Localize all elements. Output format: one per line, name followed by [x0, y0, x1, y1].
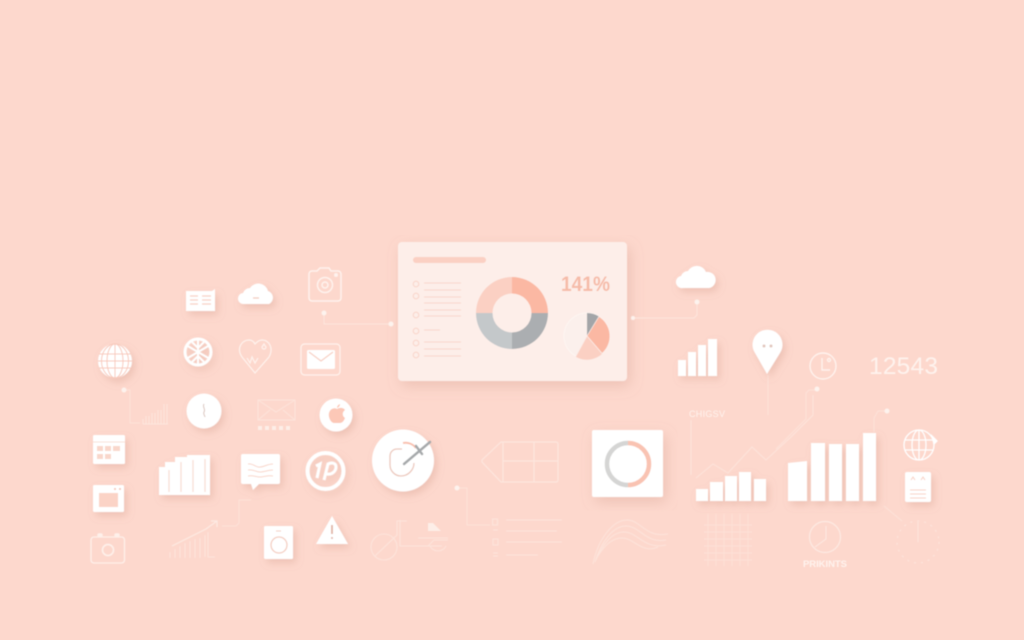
checklist [413, 281, 461, 358]
bar chart large [788, 433, 876, 501]
line chart with label [689, 395, 813, 478]
icon: snowflake wheel [185, 338, 211, 366]
connector: list [454, 486, 490, 525]
line chart with label: CHIGSV [689, 409, 725, 419]
icon: speech bubble [241, 454, 280, 490]
icon: calendar camera [91, 535, 124, 563]
icon: warning triangle [316, 516, 348, 544]
icon: browser window [93, 485, 124, 512]
icon: arrow tag grid [482, 442, 558, 482]
icon: calendar grid [93, 435, 125, 464]
icon: cloud left [238, 284, 273, 304]
icon: clock with label [803, 522, 847, 570]
icon: form document [905, 472, 931, 502]
icon: mini bars outline [143, 404, 168, 424]
connector: speech to arrow [222, 500, 251, 526]
icon: dotted clock [897, 521, 939, 563]
icon: washer tile [264, 526, 293, 559]
infographic content [91, 242, 939, 570]
card title bar [413, 257, 486, 263]
icon: bars top right [678, 339, 717, 376]
icon: camera outline [309, 268, 341, 301]
number label: 12543 [869, 353, 938, 380]
connector: card to cloud [631, 300, 700, 320]
icon: donut tile [592, 430, 663, 497]
icon: grid [704, 514, 752, 566]
panel: central dashboard card [398, 242, 627, 381]
connector: bars to dot [874, 408, 890, 432]
icon: envelope with dots [258, 400, 295, 430]
percentage label: 141% [561, 273, 610, 296]
connector: camera to card [322, 310, 394, 326]
icon: globe left [98, 344, 132, 378]
icon: p badge [308, 453, 344, 489]
icon: flowing waves [593, 520, 668, 564]
icon: mail framed [301, 344, 340, 375]
icon: clock with label: PRIKINTS [803, 559, 847, 570]
pie chart [564, 313, 610, 360]
connector: globe to mini chart [122, 388, 140, 423]
icon: heart outline [240, 340, 271, 373]
icon: globe right [904, 430, 937, 460]
icon: newspaper [186, 289, 215, 311]
bar chart small [696, 472, 766, 501]
icon: scooter [371, 520, 448, 560]
icon: map pin [753, 330, 783, 374]
icon: cloud right [676, 266, 716, 288]
connector: form to clock [884, 506, 902, 521]
icon: target dial [372, 430, 434, 492]
icon: apple badge [320, 398, 352, 432]
icon: clock round [186, 394, 222, 428]
donut chart [476, 277, 548, 349]
icon: bar chart white [159, 455, 210, 495]
connector: clock to line chart [768, 375, 820, 449]
icon: clock outline [810, 353, 836, 379]
icon: sparkline arrow [170, 521, 217, 558]
icon: checklist [492, 519, 562, 556]
